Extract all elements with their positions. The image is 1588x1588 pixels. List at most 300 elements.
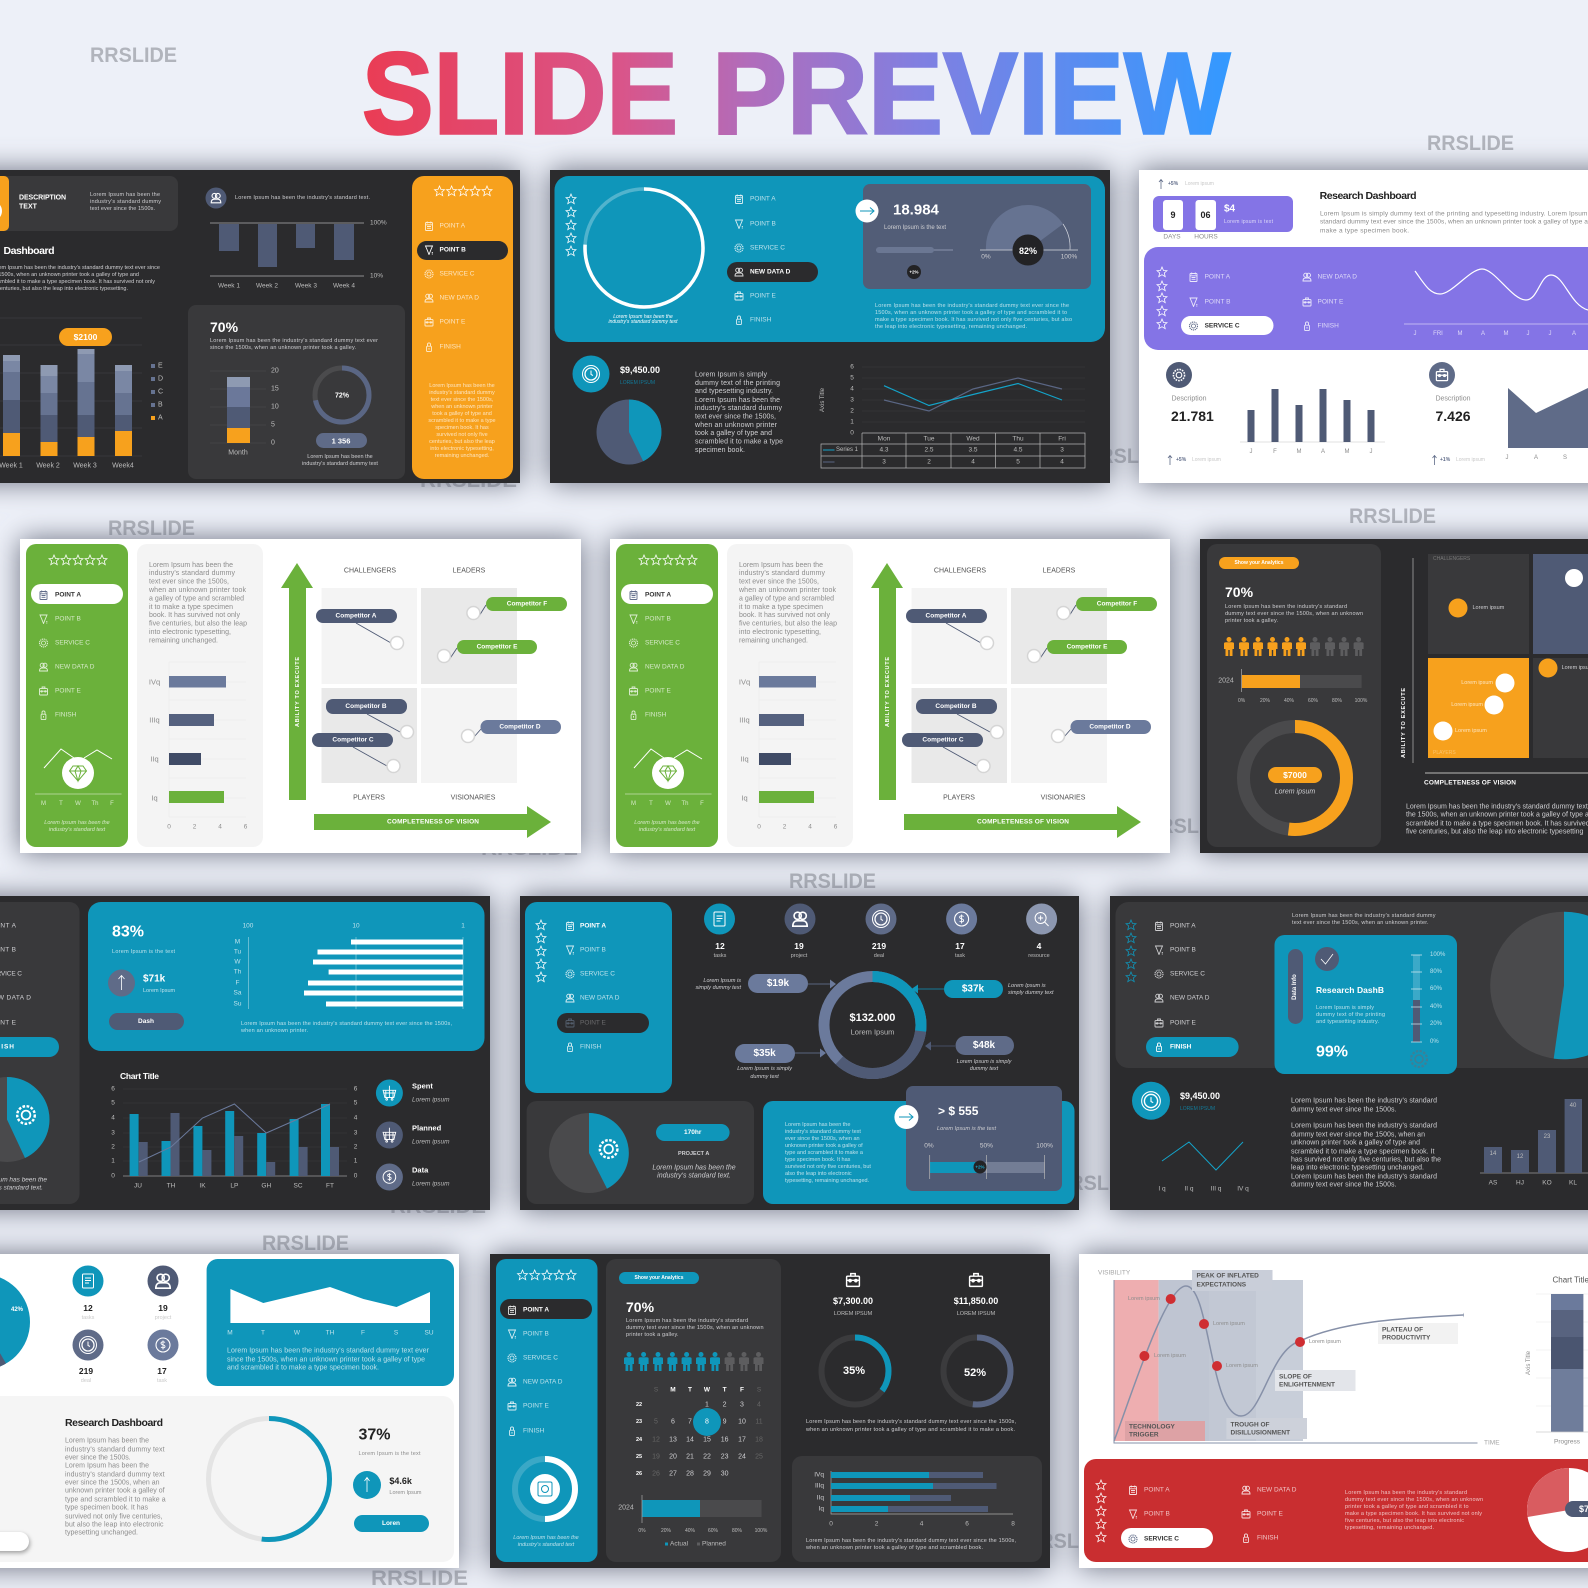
watermark: RRSLIDE (90, 44, 177, 67)
stat: 7.426: Description (1435, 396, 1471, 402)
stacked bar chart: E (158, 362, 163, 370)
slide: purple research dashboard (1139, 170, 1588, 483)
panel: orange navigation: when an unknown printer (430, 404, 493, 410)
panel: text and bars: 2 (783, 824, 787, 830)
quadrant chart: Lorem ipsum (1461, 680, 1493, 686)
panel: project pie: PROJECT A (678, 1151, 709, 1157)
panel: text and bars: it to make a type specimen (739, 604, 823, 611)
slide: orange quadrant (1200, 539, 1588, 853)
panel: teal area chart: and scrambled it to make a type specimen book. (227, 1364, 379, 1372)
panel: 70%: 0 (271, 440, 275, 446)
callouts: dummy text (970, 1066, 999, 1072)
stat: 21.781: Description (1171, 396, 1207, 402)
panel: teal area chart: Lorem Ipsum has been the industry's standard dummy text ever (227, 1348, 430, 1354)
slide: calendar dashboard (490, 1254, 1050, 1568)
value: LOREM IPSUM (620, 380, 655, 386)
bar chart: weeks: 10% (370, 272, 383, 280)
quadrant chart: Lorem ipsum (1472, 605, 1505, 611)
slide: teal gauge dashboard (550, 170, 1110, 483)
panel: gauge: +2% (909, 270, 919, 274)
panel: research card: 99% (1316, 1044, 1348, 1060)
chart: hype cycle: PRODUCTIVITY (1382, 1334, 1431, 1342)
stacked bar chart: Week 3 (73, 462, 97, 470)
arrow: ability to execute: ABILITY TO EXECUTE (885, 657, 891, 727)
panel: top: POINT B (1170, 946, 1196, 954)
panel: text and bars: book. It has survived not only (739, 612, 830, 619)
chart: hype cycle: PEAK OF INFLATED (1196, 1272, 1259, 1280)
panel: green navigation: industry's standard text (49, 827, 106, 833)
calendar: 17 (738, 1436, 746, 1444)
chart: combo bars and line: FT (326, 1182, 334, 1190)
calendar: 25 (755, 1454, 763, 1460)
stat: 21.781 (1166, 362, 1221, 465)
panel: price slider: > $ 555 (938, 1104, 979, 1118)
calendar: 10 (738, 1418, 746, 1426)
competitor callouts: Competitor F (1097, 600, 1137, 608)
competitor callouts (312, 597, 567, 772)
panel: purple navigation and line chart: J (1526, 331, 1530, 337)
competitor callouts: Competitor A (336, 612, 377, 620)
heading: dashboard: Dashboard (4, 245, 54, 257)
line chart (1158, 1142, 1249, 1192)
stacked bar chart: D (158, 376, 163, 382)
panel: horizontal bars: Iq (819, 1506, 824, 1512)
text block: make a type specimen book. (1320, 228, 1409, 234)
chart: combo bars and line: TH (167, 1182, 176, 1190)
panel: 70%: 15 (271, 386, 279, 392)
chart: hype cycle: Lorem ipsum (1154, 1353, 1186, 1359)
panel: teal horizontal bars: Lorem Ipsum (143, 988, 176, 994)
panel: orange navigation (412, 176, 513, 479)
panel: analytics and calendar: dummy text ever since the 1500s, when an unknown (626, 1325, 764, 1331)
watermark: RRSLIDE (481, 837, 578, 860)
panel: description: text ever since the 1500s. (90, 206, 155, 212)
chart: combo bars and line: GH (261, 1182, 271, 1190)
competitor callouts (902, 597, 1157, 772)
title (362, 28, 1230, 158)
line chart with data table: Fri (1058, 436, 1066, 442)
panel: research summary: industry's standard dummy text (65, 1446, 165, 1454)
panel: description: industry's standard dummy (90, 199, 161, 205)
watermark: RRSLIDE (390, 1195, 486, 1218)
panel: research summary: type specimen book. It has (65, 1504, 148, 1512)
panel: price slider: 0% (924, 1142, 934, 1150)
calendar: 23 (721, 1454, 729, 1460)
line chart with data table: 2.5 (924, 446, 934, 454)
panel: text and bars: industry's standard dummy (149, 570, 236, 577)
watermark: RRSLIDE (108, 517, 195, 540)
progress bar: Planned (702, 1540, 726, 1548)
bar chart: weeks: Week 4 (333, 282, 355, 290)
arrow: completeness of vision: COMPLETENESS OF VISION (387, 818, 479, 826)
icon row: stats: project (791, 953, 808, 959)
icon row: stats: resource (1028, 953, 1050, 959)
competitor callouts: Competitor D (499, 724, 541, 730)
panel: teal text: survived not only five centuries, but (785, 1164, 871, 1170)
panel: gauge (863, 184, 1091, 289)
panel: research card: Research DashB (1316, 985, 1384, 995)
text block: scrambled it to make a type (695, 438, 783, 446)
icon row: stats: 4 (1037, 941, 1042, 951)
panel: navigation: FINISH (523, 1428, 545, 1434)
kpi: $11,850.00: 52% (964, 1367, 986, 1379)
calendar: 18 (755, 1436, 763, 1444)
panel: research summary: Lorem Ipsum is the text (358, 1451, 421, 1457)
kpi: $7,300.00 (822, 1274, 888, 1404)
pictogram: people (624, 1352, 764, 1371)
progress bar (618, 1495, 768, 1548)
panel: research summary: Loren (382, 1520, 400, 1527)
panel: text and bars: Lorem Ipsum has been the (739, 562, 823, 569)
panel: teal horizontal bars: W (234, 958, 241, 966)
line chart with data table: 3.5 (968, 446, 978, 454)
icon row: stats: 12 (715, 941, 725, 951)
panel: teal text: also the leap into electronic (785, 1171, 852, 1177)
panel: teal header: the leap into electronic typesetting, remaining unchanged. (875, 324, 1027, 330)
panel: text and bars: when an unknown printer took (738, 587, 836, 594)
panel: red navigation: POINT E (1257, 1510, 1284, 1518)
panel: text and bars: 6 (834, 824, 838, 830)
panel: text and bars: text ever since the 1500s, (739, 578, 819, 586)
slide: hype cycle (1079, 1254, 1588, 1568)
chart: hype cycle: SLOPE OF (1279, 1374, 1312, 1380)
panel: price slider: 50% (980, 1142, 993, 1150)
chart: combo bars and line: 6 (111, 1086, 115, 1092)
legend: spent planned data: Data (412, 1166, 429, 1174)
panel: 70%: 1 356 (332, 436, 350, 446)
calendar: 5 (654, 1418, 658, 1426)
calendar: 6 (671, 1418, 675, 1426)
text block: dummy text ever since the 1500s, when an (1291, 1132, 1425, 1138)
quadrant chart: ABILITY TO EXECUTE (1401, 688, 1407, 758)
pie chart: 42% (11, 1307, 24, 1313)
donut chart (1244, 726, 1346, 830)
line chart with data table: 6 (850, 364, 854, 370)
icon stats: project (155, 1315, 172, 1321)
panel: text and bars: IIIq (739, 716, 750, 724)
chart: hype cycle: Lorem ipsum (1213, 1321, 1245, 1327)
stacked bar chart: C (158, 388, 163, 396)
callouts (695, 974, 1054, 1080)
panel: top: Lorem Ipsum has been the industry's standard dummy (1292, 913, 1436, 919)
chart: stacked progress: Chart Title (1552, 1276, 1588, 1284)
calendar: 15 (703, 1436, 711, 1444)
chart: hype cycle: DISILLUSIONMENT (1230, 1430, 1290, 1436)
panel: orange navigation: industry's standard dummy (429, 390, 495, 396)
icon stats (72, 1266, 178, 1384)
chart: combo bars and line: 2 (111, 1144, 115, 1150)
pictogram: people (1224, 637, 1364, 656)
panel: research card: Data Info (1292, 974, 1298, 1000)
panel: teal area chart: TH (326, 1330, 335, 1336)
bar chart: weeks (210, 220, 387, 290)
panel: research summary: industry's standard dummy text (65, 1472, 165, 1478)
progress bar: 2024 (1218, 678, 1234, 684)
panel: green navigation: POINT E (55, 688, 82, 694)
panel: research summary: Lorem Ipsum has been the (65, 1462, 149, 1470)
line chart with data table: 4 (1060, 458, 1064, 466)
panel: purple navigation and line chart: A (1572, 331, 1576, 337)
panel: purple navigation and line chart: SERVICE C (1205, 322, 1240, 330)
panel: text and bars: when an unknown printer took (148, 587, 246, 594)
stacked bar chart: Week 2 (36, 462, 60, 470)
calendar (636, 1386, 763, 1478)
panel: teal horizontal bars: $71k (143, 974, 166, 984)
slide: green quadrant A (20, 539, 581, 853)
chart: combo bars and line: 0 (354, 1172, 358, 1180)
line chart with data table (820, 364, 1085, 468)
calendar: 16 (721, 1436, 729, 1444)
competitor callouts: Competitor C (922, 736, 964, 744)
panel: text and bars: IVq (149, 678, 160, 686)
callouts: Lorem Ipsum is simply (737, 1066, 793, 1072)
panel: 70%: since the 1500s, when an unknown printer took a galley. (210, 345, 356, 351)
bar chart: F (1273, 449, 1277, 455)
panel: orange navigation: text ever since the 1500s, (431, 397, 494, 403)
panel: green navigation: W (75, 801, 81, 807)
title: PREVIEW (712, 28, 1230, 158)
panel: 70%: 70% (210, 319, 239, 335)
calendar: 7 (688, 1418, 692, 1426)
line chart with data table: 4 (971, 458, 975, 466)
heading: Research Dashboard (1320, 190, 1417, 202)
panel: description: DESCRIPTION (19, 194, 66, 202)
panel: orange navigation: NEW DATA D (440, 294, 479, 302)
panel: 70%: 72% (335, 392, 350, 400)
calendar: 14 (686, 1436, 694, 1444)
calendar: 24 (636, 1437, 643, 1443)
callouts: $35k (753, 1048, 776, 1059)
counter: days hours: Lorem ipsum is text (1224, 219, 1274, 225)
legend: spent planned data: Lorem ipsum (412, 1096, 450, 1104)
panel: green navigation: Th (681, 801, 689, 807)
line chart with data table: Axis Title (820, 387, 826, 412)
watermark: RRSLIDE (1085, 445, 1172, 468)
panel: green navigation: F (700, 801, 704, 807)
panel: teal header: FINISH (750, 316, 772, 324)
panel: teal horizontal bars (88, 902, 484, 1051)
watermark: RRSLIDE (1025, 1530, 1112, 1553)
chart: hype cycle: TROUGH OF (1230, 1422, 1270, 1428)
panel: teal area chart: SU (424, 1330, 434, 1336)
chart: combo bars and line (111, 1071, 358, 1190)
chart: combo bars and line: 1 (111, 1158, 115, 1164)
panel: teal header: industry's standard dummy text (608, 319, 678, 325)
panel: horizontal bars: 6 (965, 1520, 969, 1528)
panel: green navigation: T (59, 801, 63, 807)
panel: analytics and calendar: 70% (626, 1299, 655, 1315)
panel: teal horizontal bars: M (235, 938, 240, 946)
calendar: 19 (652, 1454, 660, 1460)
chart: combo bars and line: SC (293, 1182, 303, 1190)
panel: teal header: POINT B (750, 220, 776, 228)
bar chart: 23 (1544, 1134, 1551, 1140)
panel: teal text: type and scrambled it to make a (785, 1150, 864, 1156)
panel: red navigation: POINT A (1144, 1486, 1170, 1494)
panel: analytics: printer took a galley. (1225, 618, 1278, 624)
panel: research summary: typesetting unchanged. (65, 1530, 138, 1536)
line chart with data table: Wed (966, 436, 980, 442)
panel: gauge: 0% (981, 254, 991, 260)
text block: leap into electronic typesetting unchanged. (1291, 1164, 1424, 1172)
progress bar: Actual (670, 1540, 689, 1548)
text block: unknown printer took a galley of type and (1291, 1140, 1420, 1146)
icon: person (206, 188, 226, 208)
callouts: $37k (962, 984, 985, 994)
panel: purple navigation and line chart: NEW DATA D (1318, 274, 1357, 280)
panel: red navigation: five centuries, but also the leap into electronic (1345, 1518, 1464, 1524)
panel: text and bars: IVq (739, 678, 750, 686)
calendar: 26 (636, 1471, 642, 1477)
panel: green navigation: NEW DATA D (55, 664, 95, 670)
chart: stacked progress: Progress (1554, 1438, 1581, 1446)
panel: teal text: Lorem Ipsum has been the (785, 1122, 850, 1128)
icon stats: tasks (82, 1315, 95, 1321)
line chart: I q (1158, 1186, 1166, 1192)
panel: horizontal bars: IIIq (815, 1482, 824, 1490)
panel: navigation: POINT B (580, 946, 606, 954)
line chart: III q (1211, 1186, 1222, 1192)
slide: orange dashboard (0, 170, 520, 483)
panel: horizontal bars: 4 (920, 1520, 924, 1528)
chart: hype cycle: Lorem ipsum (1309, 1339, 1341, 1345)
panel: green navigation: M (631, 801, 636, 807)
panel: top: SERVICE C (1170, 970, 1205, 978)
line chart with data table: 2 (850, 408, 854, 414)
calendar: S (757, 1386, 762, 1394)
panel: horizontal bars: 2 (875, 1520, 879, 1528)
ring chart: Lorem Ipsum (851, 1028, 894, 1036)
panel: top: NEW DATA D (1170, 994, 1210, 1002)
panel: teal header (554, 176, 1105, 342)
panel: navigation: POINT A (580, 922, 606, 930)
panel: purple navigation and line chart: POINT E (1318, 298, 1344, 306)
icon: clock (1132, 1082, 1170, 1120)
bar chart: 40 (1570, 1103, 1577, 1109)
slide: teal bars dashboard (0, 896, 490, 1210)
panel: text and bars: remaining unchanged. (149, 638, 218, 644)
panel: teal horizontal bars: 10 (352, 922, 360, 930)
chart: hype cycle: VISIBILITY (1098, 1270, 1131, 1276)
text block: Lorem Ipsum has been the industry's standard (1291, 1122, 1437, 1130)
line chart with data table: 2 (927, 458, 931, 466)
panel: orange navigation: Lorem Ipsum has been the (429, 383, 495, 389)
chart: hype cycle: EXPECTATIONS (1196, 1282, 1247, 1288)
legend: spent planned data: Lorem ipsum (412, 1138, 450, 1146)
calendar: 24 (738, 1454, 746, 1460)
text block (805, 1419, 1016, 1433)
panel: green navigation: FINISH (55, 712, 77, 718)
progress bar: 40% (1284, 698, 1295, 704)
calendar: T (723, 1386, 727, 1394)
panel: text and bars: five centuries, but also the leap (149, 620, 247, 628)
panel: green navigation (26, 544, 128, 847)
text block: dummy text of the printing (695, 380, 780, 387)
panel: orange navigation: survived not only five (436, 432, 488, 438)
panel: text and bars: 0 (757, 824, 761, 830)
ring chart: $132.000 (850, 1012, 895, 1024)
panel: red navigation: SERVICE C (1144, 1536, 1179, 1542)
panel: orange navigation: POINT A (440, 222, 466, 230)
panel: green navigation: W (665, 801, 671, 807)
icon stats: 219 (79, 1366, 93, 1376)
arrow: completeness of vision (904, 806, 1141, 838)
panel: teal horizontal bars: Su (234, 1000, 242, 1008)
panel: teal horizontal bars: when an unknown printer. (240, 1028, 308, 1034)
calendar: 30 (721, 1470, 729, 1478)
text block: industry's standard dummy (695, 405, 782, 412)
panel: orange navigation: took a galley of type and (432, 411, 492, 417)
panel: research summary: $4.6k (389, 1476, 413, 1486)
watermark: RRSLIDE (262, 1232, 349, 1255)
text block: took a galley of type and (695, 430, 772, 437)
bar chart: weeks: Week 1 (218, 282, 240, 290)
chart: stacked progress (1526, 1276, 1588, 1446)
panel: research card: 100% (1430, 952, 1446, 958)
panel: green navigation: Th (91, 801, 99, 807)
bar chart: M (1344, 449, 1350, 455)
text block: Lorem Ipsum is simply (695, 372, 768, 378)
quadrant chart: PLAYERS (1433, 750, 1456, 756)
panel: research summary: unknown printer took a galley of (65, 1488, 165, 1494)
panel: teal horizontal bars: 1 (461, 922, 465, 930)
kpi: $7,300.00: $7,300.00 (833, 1296, 873, 1306)
panel: research summary: type and scrambled it to make a (65, 1496, 166, 1504)
legend: spent planned data: Lorem ipsum (412, 1180, 450, 1188)
panel: green navigation: POINT B (55, 616, 81, 622)
panel: gauge: 82% (1019, 246, 1037, 256)
title: SLIDE (362, 28, 678, 158)
panel: orange navigation: SERVICE C (440, 270, 475, 278)
panel: navigation (496, 1259, 598, 1562)
panel: horizontal bars: when an unknown printer took a galley of type and scrambled book. (805, 1545, 983, 1551)
text block: when an unknown printer (694, 422, 778, 429)
quadrant grid: CHALLENGERS (934, 568, 986, 574)
progress bar: 60% (1308, 698, 1319, 704)
progress bar: 0% (638, 1528, 646, 1534)
panel: research card: 40% (1430, 1004, 1443, 1010)
panel: analytics (1207, 544, 1381, 847)
bar chart: 14 (1490, 1151, 1497, 1157)
panel: green navigation: M (41, 801, 46, 807)
quadrant chart: CHALLENGERS (1433, 556, 1471, 562)
panel: research card: 20% (1430, 1021, 1443, 1027)
quadrant grid: CHALLENGERS (344, 568, 396, 574)
panel: top (1116, 902, 1588, 1068)
competitor callouts: Competitor F (507, 600, 547, 608)
panel: teal horizontal bars: Dash (138, 1018, 154, 1025)
stacked bar chart (0, 318, 163, 470)
panel: text and bars: IIq (740, 754, 749, 764)
bar chart: weeks: Week 2 (256, 282, 278, 290)
panel: navigation: POINT E (580, 1020, 607, 1026)
text block (1320, 210, 1588, 234)
calendar: 22 (636, 1402, 642, 1408)
panel: text and bars: 6 (244, 824, 248, 830)
panel: green navigation: Lorem Ipsum has been the (44, 820, 110, 826)
area chart (1506, 388, 1588, 461)
chart: combo bars and line: 4 (354, 1114, 358, 1122)
panel: green navigation: T (649, 801, 653, 807)
line chart with data table: 4.3 (879, 446, 889, 454)
panel: text and bars (727, 544, 853, 847)
panel: red navigation: printer took a galley of type and scrambled it to (1345, 1504, 1468, 1510)
panel: navigation: SERVICE C (580, 970, 615, 978)
panel: green navigation: POINT E (645, 688, 672, 694)
stacked bar chart: A (158, 414, 163, 422)
panel: text and bars: into electronic typesetting, (739, 629, 821, 636)
panel: teal horizontal bars: Tu (234, 948, 242, 956)
